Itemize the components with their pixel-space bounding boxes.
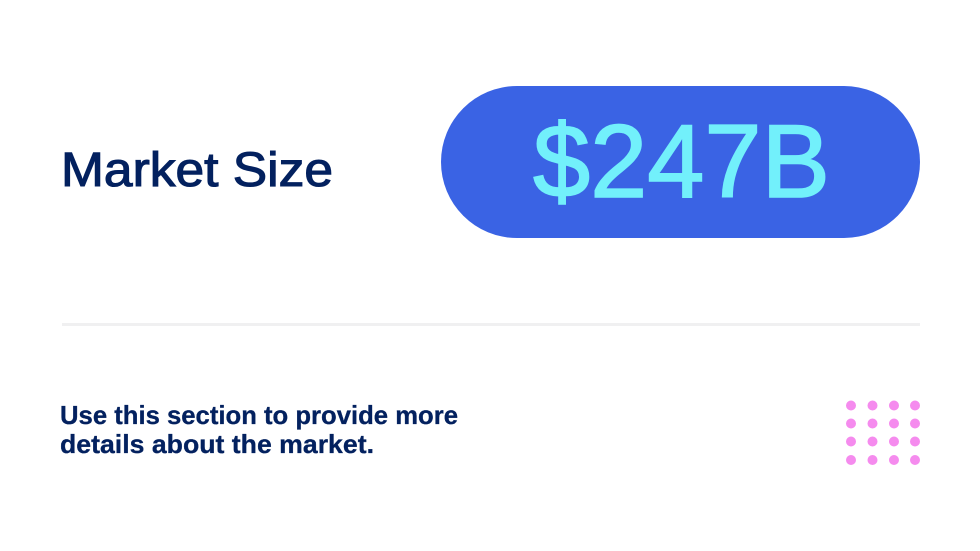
- description text: [60, 400, 458, 459]
- description text: Use this section to provide more: [60, 400, 458, 430]
- heading: Market Size: Market Size: [61, 144, 333, 197]
- description text: details about the market.: [60, 429, 374, 459]
- value pill: $247B: $247B: [533, 104, 830, 220]
- icon: pink dot grid: [846, 400, 920, 465]
- value pill: $247B: [441, 86, 920, 238]
